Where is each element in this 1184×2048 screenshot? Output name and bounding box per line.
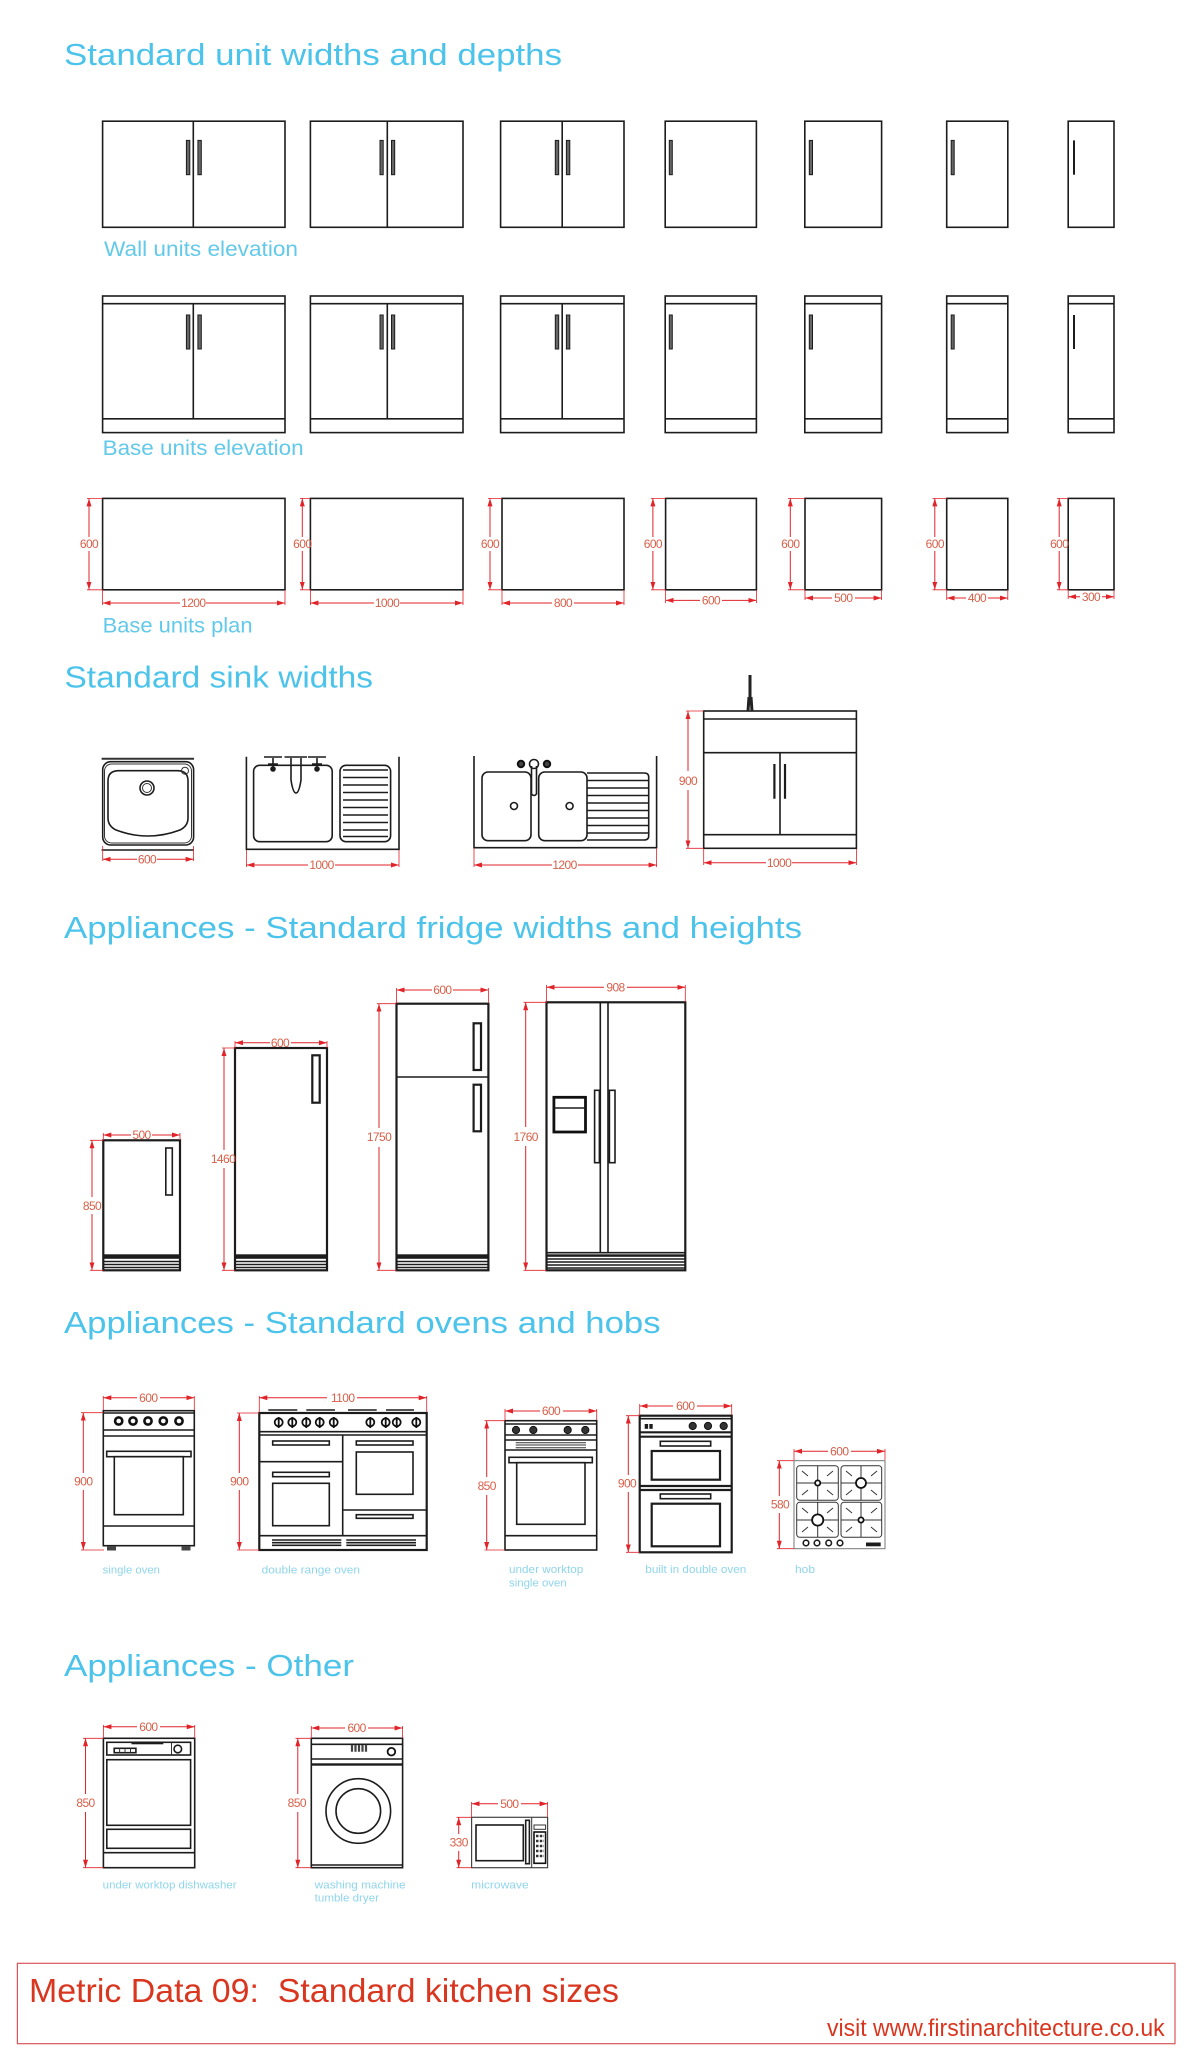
plan unit 800 with dimensions: 800 xyxy=(554,596,573,610)
plan unit 1200 with dimensions xyxy=(80,498,285,610)
heading: appliances other: Appliances - Other xyxy=(64,1648,354,1683)
plan unit 600 with dimensions xyxy=(644,498,756,608)
caption: washing machine tumble dryer: tumble dryer xyxy=(315,1893,379,1905)
hob 600 x 580 xyxy=(771,1444,885,1549)
fridge 600 x 1460: 600 xyxy=(271,1036,290,1050)
plan unit 500 with dimensions: 600 xyxy=(781,537,800,551)
caption: microwave: microwave xyxy=(471,1879,529,1891)
footer title: Metric Data 09: Standard kitchen sizes xyxy=(29,1972,619,2009)
wall units elevation row xyxy=(103,121,1114,227)
plan unit 600 with dimensions: 600 xyxy=(702,594,721,608)
caption: hob: hob xyxy=(795,1564,815,1576)
plan unit 300 with dimensions: 300 xyxy=(1082,590,1101,604)
caption: under worktop dishwasher: under worktop dishwasher xyxy=(103,1879,237,1891)
plan unit 600 with dimensions: 600 xyxy=(644,537,663,551)
hob 600 x 580: 600 xyxy=(830,1444,849,1458)
heading: ovens and hobs: Appliances - Standard ovens and hobs xyxy=(64,1305,661,1340)
american fridge 908 x 1760 xyxy=(514,980,685,1270)
built in double oven 600 x 900: 900 xyxy=(618,1476,637,1490)
plan unit 500 with dimensions: 500 xyxy=(834,591,853,605)
fridge-freezer 600 x 1750 xyxy=(367,983,488,1270)
plan unit 500 with dimensions xyxy=(781,498,882,605)
built in double oven 600 x 900: 600 xyxy=(676,1399,695,1413)
caption: washing machine tumble dryer xyxy=(314,1879,406,1905)
wall unit 500 xyxy=(805,121,882,227)
dishwasher 600 x 850 xyxy=(76,1720,195,1868)
american fridge 908 x 1760: 1760 xyxy=(514,1130,539,1144)
double range oven 1100 x 900: 900 xyxy=(230,1474,249,1488)
plan unit 800 with dimensions xyxy=(481,498,624,610)
fridge-freezer 600 x 1750: 600 xyxy=(433,983,452,997)
single oven 600 x 900: 600 xyxy=(139,1391,158,1405)
wall unit 1200 xyxy=(103,121,285,227)
base unit 800 xyxy=(501,296,624,433)
caption: under worktop single oven: single oven xyxy=(509,1578,567,1590)
double range oven 1100 x 900: 1100 xyxy=(331,1391,355,1405)
fridge 500 x 850: 500 xyxy=(132,1128,152,1142)
plan unit 1000 with dimensions: 600 xyxy=(293,537,312,551)
plan unit 300 with dimensions xyxy=(1050,498,1114,604)
plan unit 400 with dimensions xyxy=(926,498,1008,605)
caption: built in double oven: built in double oven xyxy=(645,1564,746,1576)
sink base unit elevation 1000 x 900 xyxy=(679,675,856,870)
sink base unit elevation 1000 x 900: 1000 xyxy=(767,856,792,870)
washing machine 600 x 850: 850 xyxy=(288,1796,307,1810)
sink 1000 with drainer xyxy=(246,757,399,872)
sink 1200 double bowl with drainer: 1200 xyxy=(552,858,578,872)
fridge-freezer 600 x 1750: 1750 xyxy=(367,1130,392,1144)
caption: under worktop single oven xyxy=(509,1564,583,1590)
plan unit 300 with dimensions: 600 xyxy=(1050,537,1069,551)
base unit 400 xyxy=(947,296,1008,433)
caption: base units elevation: Base units elevation xyxy=(103,437,304,460)
sink 1200 double bowl with drainer xyxy=(474,756,657,872)
caption: wall units elevation: Wall units elevation xyxy=(104,238,298,261)
footer panel xyxy=(17,1963,1175,2044)
caption: single oven: single oven xyxy=(103,1564,160,1576)
plan unit 1000 with dimensions: 1000 xyxy=(375,596,400,610)
microwave 500 x 330 xyxy=(450,1797,548,1868)
fridge 600 x 1460 xyxy=(211,1036,327,1270)
american fridge 908 x 1760: 908 xyxy=(606,980,626,994)
base units plan row xyxy=(80,498,1114,610)
plan unit 400 with dimensions: 600 xyxy=(926,537,945,551)
base unit 1000 xyxy=(310,296,463,433)
fridge 500 x 850: 850 xyxy=(83,1199,102,1213)
washing machine 600 x 850: 600 xyxy=(347,1721,367,1735)
wall unit 300 xyxy=(1068,121,1114,227)
single oven 600 x 900 xyxy=(74,1391,194,1550)
plan unit 1000 with dimensions xyxy=(293,498,463,610)
footer website: visit www.firstinarchitecture.co.uk xyxy=(827,2015,1166,2042)
sink 1000 with drainer: 1000 xyxy=(309,858,335,872)
double range oven 1100 x 900 xyxy=(230,1391,427,1550)
fridge 600 x 1460: 1460 xyxy=(211,1152,236,1166)
single oven 600 x 900: 900 xyxy=(74,1474,93,1488)
caption: washing machine tumble dryer: washing machine xyxy=(314,1879,406,1891)
microwave 500 x 330: 330 xyxy=(450,1836,469,1850)
heading: standard sink widths: Standard sink widths xyxy=(64,660,373,695)
built in double oven 600 x 900 xyxy=(618,1399,732,1552)
wall unit 1000 xyxy=(310,121,463,227)
dishwasher 600 x 850: 850 xyxy=(76,1796,96,1810)
under worktop single oven 600 x 850: 600 xyxy=(542,1404,561,1418)
heading: fridge widths and heights: Appliances - Standard fridge widths and heights xyxy=(64,910,802,945)
wall unit 400 xyxy=(947,121,1008,227)
base units elevation row xyxy=(103,296,1114,433)
sink 600 plan: 600 xyxy=(138,852,157,866)
sink base unit elevation 1000 x 900: 900 xyxy=(679,774,698,788)
under worktop single oven 600 x 850: 850 xyxy=(478,1479,497,1493)
dishwasher 600 x 850: 600 xyxy=(139,1720,158,1734)
plan unit 1200 with dimensions: 1200 xyxy=(181,596,206,610)
plan unit 400 with dimensions: 400 xyxy=(968,591,987,605)
heading: standard unit widths and depths: Standard unit widths and depths xyxy=(64,37,562,72)
fridge 500 x 850 xyxy=(83,1128,180,1270)
caption: double range oven: double range oven xyxy=(262,1564,360,1576)
base unit 600 xyxy=(665,296,756,433)
microwave 500 x 330: 500 xyxy=(500,1797,519,1811)
sink 600 plan xyxy=(102,759,194,866)
caption: under worktop single oven: under worktop xyxy=(509,1564,583,1576)
hob 600 x 580: 580 xyxy=(771,1498,790,1512)
base unit 300 xyxy=(1068,296,1114,433)
plan unit 800 with dimensions: 600 xyxy=(481,537,500,551)
plan unit 1200 with dimensions: 600 xyxy=(80,537,99,551)
washing machine 600 x 850 xyxy=(288,1721,403,1868)
wall unit 600 xyxy=(665,121,756,227)
caption: base units plan: Base units plan xyxy=(103,615,253,638)
base unit 500 xyxy=(805,296,882,433)
base unit 1200 xyxy=(103,296,285,433)
wall unit 800 xyxy=(501,121,624,227)
under worktop single oven 600 x 850 xyxy=(478,1404,597,1550)
